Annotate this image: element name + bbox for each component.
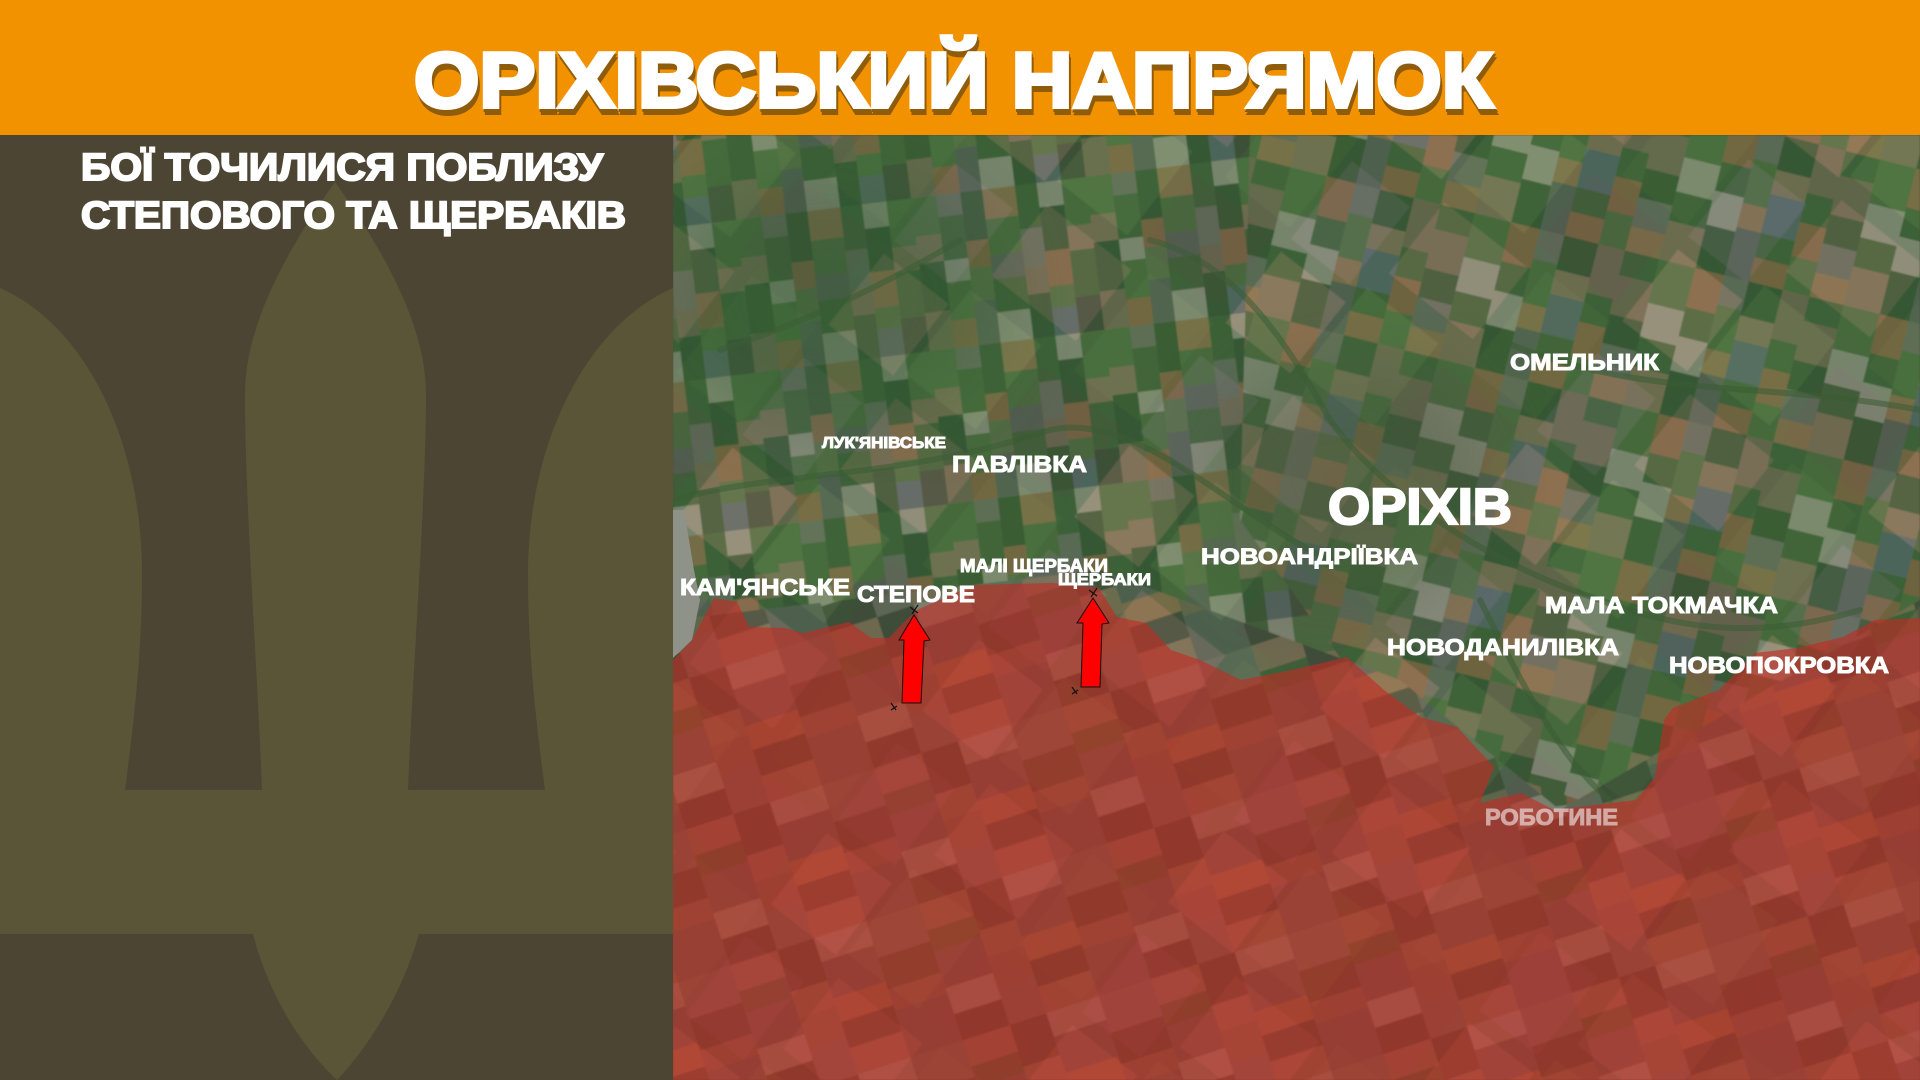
label: Степове: СТЕПОВЕ: [857, 581, 975, 607]
label: Новоданилівка: НОВОДАНИЛІВКА: [1387, 634, 1619, 660]
subtitle: СТЕПОВОГО ТА ЩЕРБАКІВ: [81, 195, 626, 237]
field mosaic: [673, 135, 1920, 1080]
title: ОРІХІВСЬКИЙ НАПРЯМОК: [414, 36, 1493, 124]
label: Павлівка: ПАВЛІВКА: [952, 451, 1087, 477]
label: Лук'янівське: ЛУК'ЯНІВСЬКЕ: [822, 435, 946, 452]
tonal wash: [660, 135, 1920, 1080]
trident emblem: [0, 182, 673, 1080]
label: Малі Щербаки: МАЛІ ЩЕРБАКИ: [960, 555, 1108, 576]
arrow: advance toward Степове: [891, 605, 930, 710]
label: Новопокровка: НОВОПОКРОВКА: [1669, 652, 1889, 678]
reservoir: [673, 510, 700, 658]
left panel: [0, 135, 673, 1080]
label: Новоандріївка: НОВОАНДРІЇВКА: [1201, 544, 1418, 569]
label: Кам'янське: КАМ'ЯНСЬКЕ: [680, 574, 850, 600]
label: Роботине: РОБОТИНЕ: [1485, 804, 1618, 830]
occupied territory: [673, 583, 1920, 1080]
label: Омельник: ОМЕЛЬНИК: [1510, 349, 1660, 375]
arrow: advance toward Щербаки: [1072, 588, 1109, 694]
subtitle: БОЇ ТОЧИЛИСЯ ПОБЛИЗУ: [81, 146, 603, 189]
header band: [0, 0, 1920, 135]
satellite map: [660, 135, 1920, 1080]
label: Щербаки: ЩЕРБАКИ: [1058, 570, 1151, 589]
label: Мала Токмачка: МАЛА ТОКМАЧКА: [1545, 592, 1778, 618]
label: Оріхів: ОРІХІВ: [1328, 478, 1512, 535]
river valleys: [673, 240, 1920, 800]
subtitle: [81, 146, 626, 237]
